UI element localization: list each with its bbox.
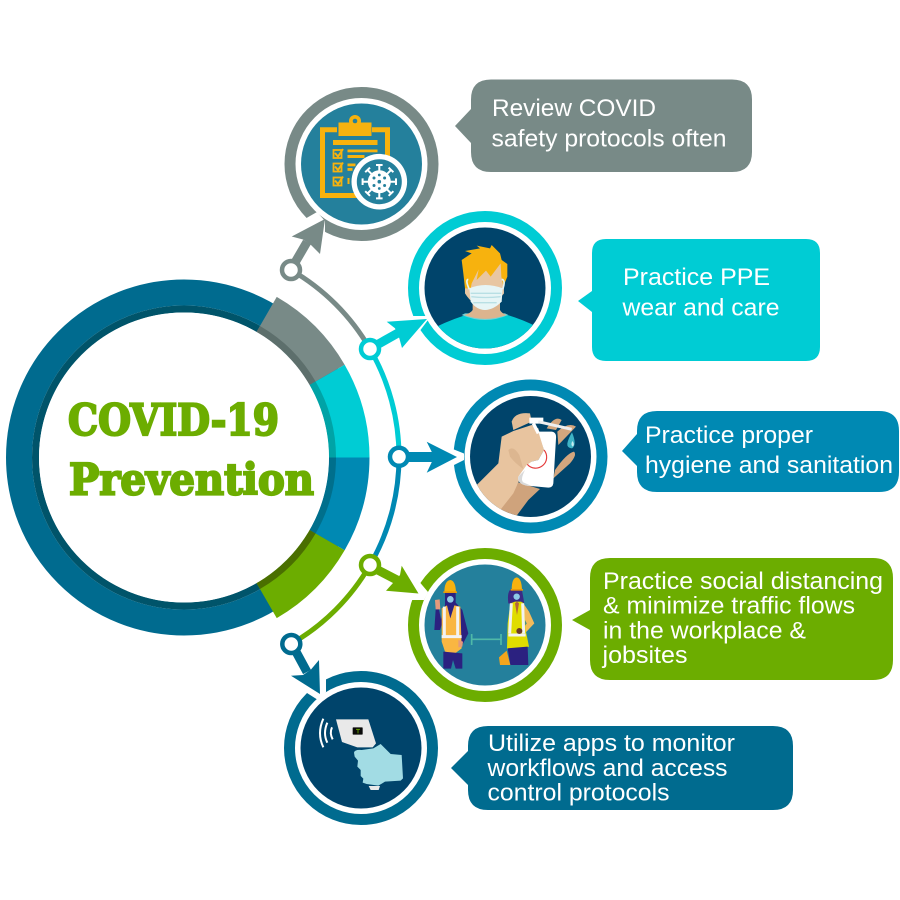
callout 1: Review COVID (492, 95, 656, 122)
distance marker (472, 634, 501, 645)
callout 4: in the workplace & (603, 618, 806, 644)
connector arc: cyan (370, 349, 399, 457)
callout 1: safety protocols often (492, 126, 726, 152)
connector arc: green (291, 565, 370, 644)
callout 5 (451, 726, 793, 810)
arrow 3 with node (390, 442, 457, 473)
arrow 1 with node (282, 219, 325, 279)
step 3 icon: hand sanitizer (445, 385, 602, 528)
arrow 5 with node (282, 635, 320, 694)
central ring with coloured segments (19, 292, 370, 622)
callout 5: control protocols (488, 780, 670, 806)
left worker (434, 580, 468, 669)
right worker (499, 577, 534, 665)
callout 5: workflows and access (486, 755, 728, 782)
arrow 2 with node (361, 319, 427, 358)
callout 3: hygiene and sanitation (645, 452, 893, 479)
callout 2: wear and care (621, 294, 780, 322)
connector arc: grey (291, 270, 370, 349)
callout 3 (622, 411, 899, 492)
step 5 icon: thermometer scanner (290, 668, 432, 820)
title: COVID-19 (68, 396, 279, 446)
step 4 icon: two workers distancing (405, 554, 556, 696)
connector arc: blue (370, 457, 399, 565)
callout 5: Utilize apps to monitor (488, 730, 735, 757)
callout 3: Practice proper (645, 422, 813, 449)
callout 4: jobsites (601, 642, 688, 669)
title (68, 396, 314, 506)
arrow 4 with node (361, 556, 418, 594)
callout 2 (578, 239, 820, 361)
callout 2: Practice PPE (623, 264, 770, 291)
callout 4: & minimize traffic flows (603, 592, 855, 620)
callout 1 (455, 80, 752, 172)
callout 4 (572, 558, 893, 680)
title: Prevention (69, 456, 314, 506)
step 1 icon: clipboard with virus (290, 92, 433, 245)
callout 4: Practice social distancing (603, 568, 883, 595)
step 2 icon: person wearing mask (405, 216, 556, 360)
